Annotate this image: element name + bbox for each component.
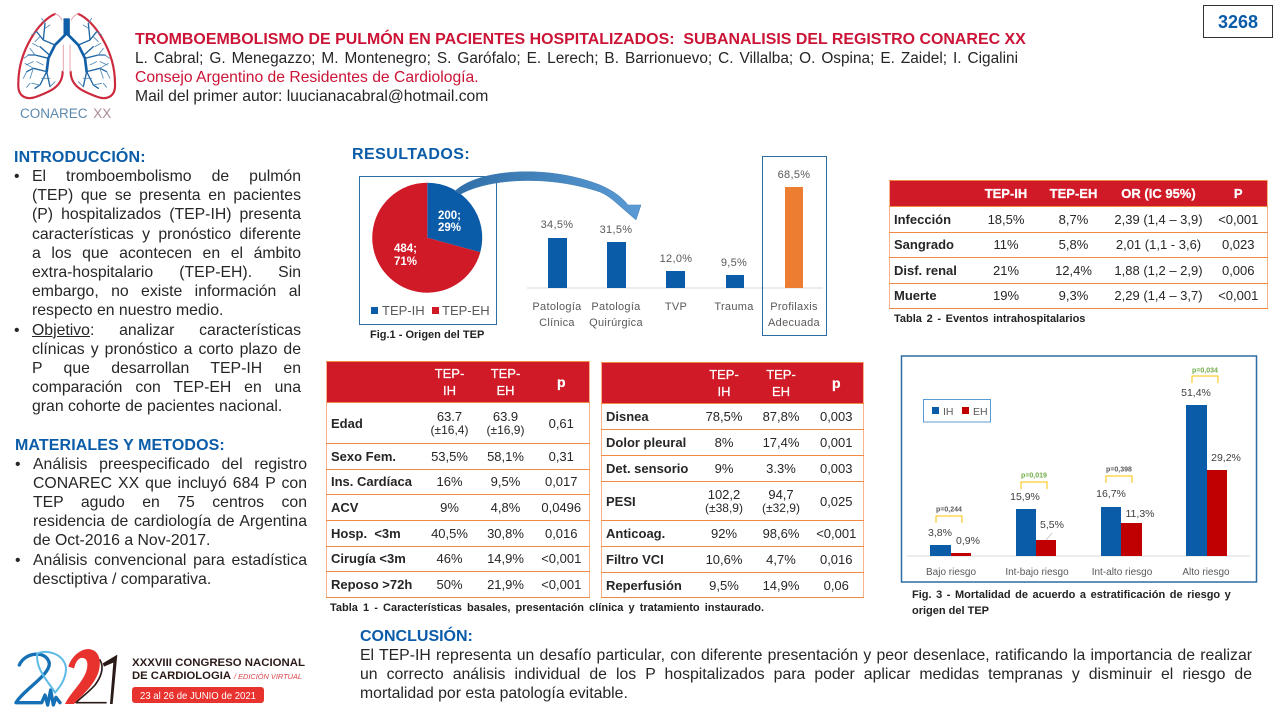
text block: conclusión — [360, 646, 1252, 702]
bar chart: profilaxis y patologías: Profilaxis — [770, 301, 818, 313]
text block: introducción: El tromboembolismo de pulmón — [32, 168, 301, 185]
table 1b: presentación clínica y tratamiento: 78,5% — [706, 409, 742, 424]
table 1a: características basales: 9,5% — [491, 474, 520, 489]
panel: fig 3 mortality bar chart: 5,5% — [1040, 519, 1064, 531]
panel: fig 3 mortality bar chart — [900, 355, 1258, 583]
panel: fig 3 mortality bar chart: 29,2% — [1211, 452, 1241, 464]
logo: 2021 congreso nacional de cardiología: XXXVIII CONGRESO NACIONAL — [132, 657, 305, 669]
bar chart: profilaxis y patologías — [527, 169, 823, 329]
table 2: eventos intrahospitalarios: Infección — [894, 212, 951, 227]
caption: tabla 1: Tabla 1 - Características basales, presentación clínica y tratamiento instaurado. — [330, 602, 764, 614]
panel: fig 3 mortality bar chart: 15,9% — [1010, 491, 1040, 503]
table 1a: características basales: Cirugía <3m — [331, 551, 406, 566]
title: TROMBOEMBOLISMO DE PULMÓN EN PACIENTES HOSPITALIZADOS: SUBANALISIS DEL REGISTRO CONAREC XX — [135, 31, 1026, 48]
arrow: from TEP-IH slice to bar chart — [455, 171, 642, 220]
table 1b: presentación clínica y tratamiento: 0,001 — [820, 435, 853, 450]
table 2: eventos intrahospitalarios: 2,39 (1,4 – 3,9) — [1114, 212, 1203, 227]
bar chart: profilaxis y patologías: 9,5% — [721, 257, 747, 269]
table 1b: presentación clínica y tratamiento: <0,001 — [816, 526, 856, 541]
logo: 2021 congreso nacional de cardiología: 23 al 26 de JUNIO de 2021 — [140, 690, 256, 702]
text: • — [15, 456, 21, 472]
table 1a: características basales: 30,8% — [487, 526, 524, 540]
table 1a: características basales — [326, 361, 590, 598]
table 1a: características basales: (±16,4) — [431, 423, 468, 437]
table 1a: características basales: 40,5% — [431, 526, 468, 540]
table 1a: características basales: Reposo >72h — [331, 577, 412, 592]
heading: resultados: RESULTADOS: — [352, 146, 470, 163]
abstract number box — [1203, 5, 1273, 38]
table 1b: presentación clínica y tratamiento: 10,6% — [706, 552, 742, 567]
table 1a: características basales: 4,8% — [491, 500, 520, 515]
panel: fig 3 mortality bar chart: p=0,019 — [1021, 472, 1047, 480]
table 2: eventos intrahospitalarios: P — [1234, 186, 1243, 201]
table 1a: características basales: EH — [496, 383, 515, 398]
bar chart: profilaxis y patologías: 34,5% — [541, 219, 573, 231]
table 1b: presentación clínica y tratamiento: (±32,9) — [762, 501, 800, 515]
table 1b: presentación clínica y tratamiento: 98,6% — [763, 526, 799, 541]
table 1b: presentación clínica y tratamiento: TEP- — [766, 367, 796, 382]
table 1b: presentación clínica y tratamiento: p — [832, 374, 841, 390]
table 2: eventos intrahospitalarios: 11% — [993, 237, 1019, 252]
table 1a: características basales: TEP- — [491, 366, 520, 381]
table 2: eventos intrahospitalarios: 0,006 — [1222, 263, 1255, 278]
table 1a: características basales: 14,9% — [487, 551, 524, 566]
text block: introducción: embargo, no existe información al — [32, 283, 301, 300]
table 1a: características basales: 63.7 — [437, 409, 462, 424]
table 1b: presentación clínica y tratamiento: Det. sensorio — [606, 461, 688, 476]
table 1a: características basales: <0,001 — [541, 577, 581, 592]
table 1a: características basales: 0,61 — [549, 416, 574, 430]
table 2: eventos intrahospitalarios: TEP-IH — [985, 186, 1027, 201]
table 2: eventos intrahospitalarios: <0,001 — [1218, 288, 1258, 303]
table 1b: presentación clínica y tratamiento: (±38,9) — [705, 501, 743, 515]
caption: tabla 2: Tabla 2 - Eventos intrahospitalarios — [894, 313, 1085, 325]
pie chart: origen del TEP — [371, 182, 490, 318]
table 2: eventos intrahospitalarios: Disf. renal — [894, 263, 957, 278]
table 1b: presentación clínica y tratamiento: 0,016 — [820, 552, 853, 567]
table 2: eventos intrahospitalarios: <0,001 — [1218, 212, 1258, 227]
panel: fig 3 mortality bar chart: 11,3% — [1126, 508, 1154, 520]
text block: materiales y metodos: TEP agudo en 75 centros con — [33, 494, 307, 511]
table 1b: presentación clínica y tratamiento: Filtro VCI — [606, 552, 664, 567]
text block: materiales y metodos: residencia de cardiología de Argentina — [33, 513, 307, 530]
text: • — [14, 168, 20, 185]
table 1b: presentación clínica y tratamiento: 0,025 — [820, 494, 853, 508]
table 1a: características basales: 0,016 — [545, 526, 578, 540]
text block: materiales y metodos: Análisis preespecificado del registro — [33, 456, 307, 472]
abstract number box: 3268 — [1218, 12, 1258, 32]
bar chart: profilaxis y patologías: Clínica — [539, 317, 575, 329]
highlight box: profilaxis adecuada — [762, 156, 827, 336]
table 1a: características basales: 58,1% — [487, 449, 524, 464]
table 1a: características basales: Sexo Fem. — [331, 449, 396, 464]
pie chart: origen del TEP: 484; — [394, 243, 417, 255]
table 1a: características basales: 16% — [436, 474, 463, 489]
table 2: eventos intrahospitalarios — [889, 180, 1268, 309]
panel: fig 1 pie chart box — [359, 176, 497, 325]
text block: introducción: (TEP) que se presenta en pacientes — [32, 187, 301, 204]
affiliation: Consejo Argentino de Residentes de Cardiología. — [135, 69, 479, 86]
table 1b: presentación clínica y tratamiento: 87,8% — [763, 409, 799, 424]
table 1b: presentación clínica y tratamiento: 4,7% — [766, 552, 796, 567]
text block: materiales y metodos: de Oct-2016 a Nov-2017. — [33, 532, 210, 549]
bar chart: profilaxis y patologías: 31,5% — [600, 224, 632, 236]
logo: CONAREC XX lungs — [17, 12, 116, 121]
table 1b: presentación clínica y tratamiento: EH — [772, 384, 790, 399]
text block: materiales y metodos: CONAREC XX que incluyó 684 P con — [33, 475, 307, 492]
text block: introducción: gran cohorte de pacientes nacional. — [32, 398, 282, 415]
panel: fig 3 mortality bar chart: p=0,244 — [936, 506, 962, 514]
bar chart: profilaxis y patologías: TVP — [665, 301, 687, 313]
caption: fig 3: Fig. 3 - Mortalidad de acuerdo a estratificación de riesgo y — [912, 589, 1231, 601]
table 1b: presentación clínica y tratamiento: IH — [718, 384, 730, 399]
table 2: eventos intrahospitalarios: 21% — [993, 263, 1019, 278]
table 1b: presentación clínica y tratamiento: 92% — [711, 526, 737, 541]
table 2: eventos intrahospitalarios: 19% — [993, 288, 1019, 303]
pie chart: origen del TEP: 29% — [438, 222, 461, 234]
text: • — [14, 322, 20, 339]
table 1a: características basales: (±16,9) — [487, 423, 524, 437]
authors: L. Cabral; G. Menegazzo; M. Montenegro; S. Garófalo; E. Lerech; B. Barrionuevo; C. Villalba; O. Ospina; E. Zaidel; I. Cigalini — [135, 50, 1018, 67]
text block: introducción: (P) hospitalizados (TEP-IH) presenta — [32, 206, 301, 223]
table 1a: características basales: 63.9 — [493, 409, 518, 424]
text block: materiales y metodos — [15, 456, 308, 588]
table 1b: presentación clínica y tratamiento: 0,06 — [824, 578, 849, 592]
text block: conclusión: mortalidad por esta patología evitable. — [360, 685, 628, 702]
bar chart: profilaxis y patologías: Adecuada — [768, 317, 821, 329]
table 1a: características basales: 21,9% — [487, 577, 524, 592]
bar chart: profilaxis y patologías: Patología — [532, 301, 582, 313]
table 1b: presentación clínica y tratamiento — [601, 362, 864, 598]
table 1b: presentación clínica y tratamiento: TEP- — [709, 367, 739, 382]
logo: 2021 congreso nacional de cardiología: / EDICIÓN VIRTUAL — [233, 672, 302, 681]
table 1a: características basales: 0,0496 — [541, 500, 581, 515]
text block: introducción: Objetivo: analizar características — [32, 322, 301, 339]
table 2: eventos intrahospitalarios: 5,8% — [1059, 237, 1088, 252]
table 1b: presentación clínica y tratamiento: 17,4% — [763, 435, 799, 450]
table 1b: presentación clínica y tratamiento: Anticoag. — [606, 526, 665, 541]
caption: fig 1: Fig.1 - Origen del TEP — [370, 329, 484, 341]
panel: fig 3 mortality bar chart: Int-alto riesgo — [1092, 567, 1153, 578]
heading: materiales y metodos: MATERIALES Y METODOS: — [15, 437, 225, 454]
table 1b: presentación clínica y tratamiento: 9,5% — [709, 578, 739, 592]
table 2: eventos intrahospitalarios: 2,29 (1,4 – 3,7) — [1114, 288, 1203, 303]
table 1a: características basales: Edad — [331, 416, 363, 430]
table 1a: características basales: Ins. Cardíaca — [331, 474, 412, 489]
table 2: eventos intrahospitalarios: 18,5% — [988, 212, 1024, 227]
panel: fig 3 mortality bar chart: Int-bajo riesgo — [1005, 567, 1069, 578]
panel: fig 3 mortality bar chart: 51,4% — [1181, 387, 1211, 399]
text block: introducción: características y pronóstico diferente — [32, 226, 301, 243]
panel: fig 3 mortality bar chart: p=0,398 — [1106, 466, 1132, 474]
table 1b: presentación clínica y tratamiento: 102,2 — [708, 487, 740, 502]
header: title, authors, affiliation, contact — [135, 30, 1026, 105]
panel: fig 3 mortality bar chart: Alto riesgo — [1182, 567, 1230, 578]
table 1a: características basales: p — [557, 374, 566, 390]
table 2: eventos intrahospitalarios: 8,7% — [1059, 212, 1088, 227]
pie chart: origen del TEP: 71% — [394, 256, 417, 268]
heading: introducción: INTRODUCCIÓN: — [14, 149, 146, 166]
text block: introducción: a los que acontecen en el ámbito — [32, 245, 301, 262]
heading: conclusión: CONCLUSIÓN: — [360, 628, 473, 645]
table 1b: presentación clínica y tratamiento: 0,003 — [820, 461, 853, 476]
table 1b: presentación clínica y tratamiento: 14,9% — [763, 578, 799, 592]
panel: fig 3 mortality bar chart: 0,9% — [956, 535, 980, 547]
text block: introducción: comparación con TEP-EH en una — [32, 379, 301, 396]
table 1a: características basales: 53,5% — [431, 449, 468, 464]
text block: conclusión: un correcto análisis individual de los P hospitalizados para poder aplicar medidas tempranas y disminuir el riesgo de — [360, 666, 1252, 683]
pie chart: origen del TEP: TEP-EH — [442, 303, 490, 318]
panel: fig 3 mortality bar chart: p=0,034 — [1192, 368, 1218, 374]
bar chart: profilaxis y patologías: 68,5% — [778, 169, 810, 181]
table 1a: características basales: 0,31 — [549, 449, 574, 464]
table 1a: características basales: Hosp. <3m — [331, 526, 401, 540]
table 2: eventos intrahospitalarios: 1,88 (1,2 – 2,9) — [1114, 263, 1203, 278]
text: • — [15, 552, 21, 568]
table 2: eventos intrahospitalarios: TEP-EH — [1050, 186, 1097, 201]
panel: fig 3 mortality bar chart: IH — [943, 406, 954, 418]
text block: conclusión: El TEP-IH representa un desafío particular, con diferente presentación y peor desenlace, ratificando la importancia de realizar — [360, 646, 1252, 664]
text block: materiales y metodos: desctiptiva / comparativa. — [33, 571, 211, 588]
table 1a: características basales: 46% — [436, 551, 463, 566]
table 1b: presentación clínica y tratamiento: Dolor pleural — [606, 435, 686, 450]
table 2: eventos intrahospitalarios: 9,3% — [1059, 288, 1088, 303]
logo: 2021 congreso nacional de cardiología: DE CARDIOLOGIA — [132, 670, 231, 682]
bar chart: profilaxis y patologías: 12,0% — [660, 253, 692, 265]
text block: introducción: extra-hospitalario (TEP-EH). Sin — [32, 264, 301, 281]
bar chart: profilaxis y patologías: Quirúrgica — [589, 317, 643, 329]
pie chart: origen del TEP: TEP-IH — [382, 303, 425, 318]
table 1b: presentación clínica y tratamiento: 0,003 — [820, 409, 853, 424]
panel: fig 3 mortality bar chart: Bajo riesgo — [926, 567, 976, 578]
text block: materiales y metodos: Análisis convencional para estadística — [33, 552, 307, 569]
table 2: eventos intrahospitalarios: OR (IC 95%) — [1121, 186, 1196, 201]
table 2: eventos intrahospitalarios: 12,4% — [1055, 263, 1092, 278]
table 1a: características basales: 50% — [436, 577, 463, 592]
text block: introducción: clínicas y pronóstico a corto plazo de — [32, 341, 301, 358]
panel: fig 3 mortality bar chart: 3,8% — [928, 527, 952, 539]
table 2: eventos intrahospitalarios: 2,01 (1,1 - 3,6) — [1116, 237, 1201, 252]
logo: 2021 congreso nacional de cardiología — [14, 649, 305, 707]
pie chart: origen del TEP: 200; — [438, 210, 461, 222]
caption: fig 3: origen del TEP — [912, 605, 989, 617]
table 2: eventos intrahospitalarios: Muerte — [894, 288, 937, 303]
text block: introducción: P que desarrollan TEP-IH en — [32, 360, 301, 377]
table 1a: características basales: ACV — [331, 500, 358, 515]
table 1b: presentación clínica y tratamiento: 9% — [715, 461, 733, 476]
table 1b: presentación clínica y tratamiento: 94,7 — [768, 487, 794, 502]
contact: Mail del primer autor: luucianacabral@hotmail.com — [135, 88, 488, 105]
bar chart: profilaxis y patologías: Patología — [591, 301, 641, 313]
caption: fig 3 — [912, 589, 1231, 617]
table 1a: características basales: 0,017 — [545, 474, 578, 489]
panel: fig 3 mortality bar chart: EH — [973, 406, 988, 418]
logo: CONAREC XX lungs: CONAREC XX — [20, 106, 111, 121]
bar chart: profilaxis y patologías: Trauma — [714, 301, 754, 313]
text block: introducción — [14, 168, 302, 415]
table 2: eventos intrahospitalarios: 0,023 — [1222, 237, 1255, 252]
table 2: eventos intrahospitalarios: Sangrado — [894, 237, 954, 252]
table 1a: características basales: <0,001 — [541, 551, 581, 566]
table 1b: presentación clínica y tratamiento: 3.3% — [766, 461, 796, 476]
text block: introducción: respecto en nuestro medio. — [32, 302, 223, 319]
table 1b: presentación clínica y tratamiento: PESI — [606, 494, 636, 508]
panel: fig 3 mortality bar chart: 16,7% — [1096, 488, 1126, 500]
table 1a: características basales: TEP- — [435, 366, 464, 381]
table 1a: características basales: 9% — [440, 500, 459, 515]
table 1b: presentación clínica y tratamiento: Reperfusión — [606, 578, 682, 592]
table 1b: presentación clínica y tratamiento: Disnea — [606, 409, 649, 424]
table 1a: características basales: IH — [443, 383, 456, 398]
table 1b: presentación clínica y tratamiento: 8% — [715, 435, 733, 450]
